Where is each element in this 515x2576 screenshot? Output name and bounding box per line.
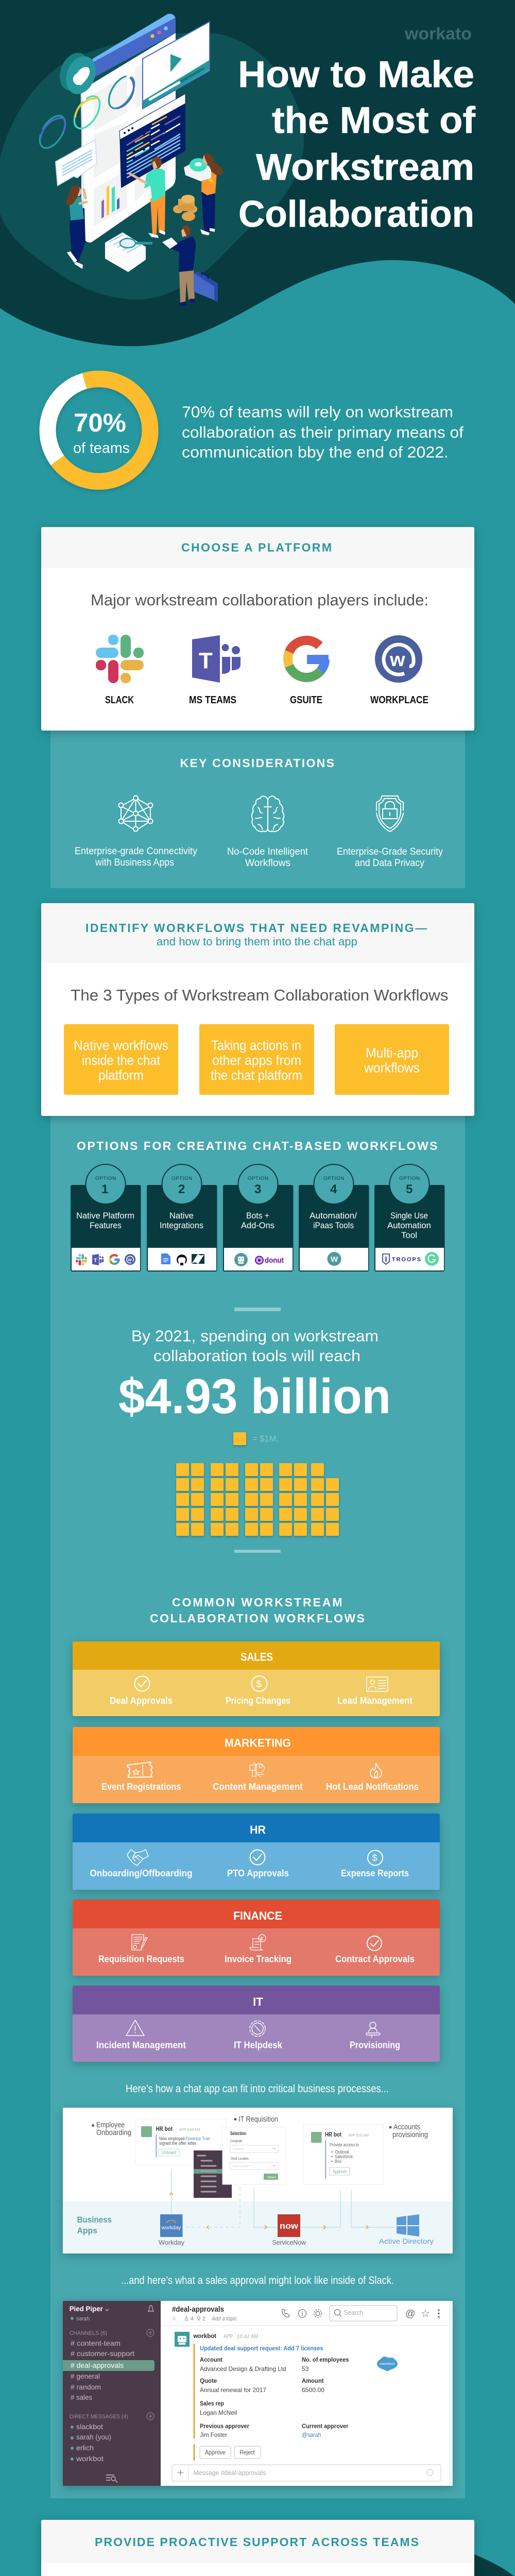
band: sales: Deal Approvals [110, 1696, 173, 1706]
heading: IDENTIFY WORKFLOWS THAT NEED REVAMPING— [85, 921, 427, 935]
icon: provisioning [366, 2022, 380, 2038]
option 3 card: Add-Ons [241, 1221, 274, 1230]
option 5 card: OPTION [399, 1176, 420, 1181]
sidebar: # content-team [71, 2339, 121, 2347]
workbot message: Account [200, 2356, 222, 2363]
sidebar: # general [71, 2372, 100, 2380]
statistic text [182, 403, 464, 461]
workbot message: Annual renewal for 2017 [200, 2386, 266, 2394]
option 4 card: iPaas Tools [313, 1221, 354, 1230]
app: workday: workday [161, 2225, 181, 2231]
option 5 card: Automation [387, 1221, 431, 1230]
code window [119, 94, 185, 188]
workbot message: Logan McNeil [200, 2409, 237, 2416]
band: finance: Contract Approvals [335, 1954, 415, 1964]
workbot message: APP [224, 2334, 233, 2340]
icon: flame [370, 1763, 382, 1778]
icon: workplace: w [389, 649, 405, 671]
donut chart: 70% of teams: of teams [73, 440, 130, 456]
briefcase [194, 272, 218, 302]
selection form card: Computer [233, 2148, 244, 2151]
icon: network [118, 795, 152, 832]
icon: warning [126, 2020, 144, 2036]
band: hr: PTO Approvals [227, 1868, 289, 1878]
approve and reject buttons [200, 2446, 261, 2459]
section title: The 3 Types of Workstream Collaboration Workflows [71, 986, 448, 1004]
logo: workato header: workato [404, 24, 472, 43]
channel header [161, 2305, 449, 2326]
icon: salesforce cloud [377, 2357, 398, 2371]
big number: $4.93 billion [118, 1369, 391, 1424]
band: it: Incident Management [96, 2040, 186, 2050]
panel: identify workflows [41, 903, 474, 1116]
icon: google docs [161, 1253, 170, 1264]
icon: dollar: $ [256, 1679, 262, 1689]
selection form card: Desk Location [233, 2165, 249, 2168]
icon: teams small [92, 1254, 104, 1265]
option 3 card: Bots + [246, 1211, 269, 1221]
channel header: ♙ 4 [184, 2316, 194, 2322]
icon: workplace [375, 635, 422, 683]
sidebar: # random [71, 2383, 101, 2391]
sidebar: sarah [76, 2316, 90, 2322]
option 3 card: OPTION [248, 1176, 268, 1181]
hr bot card 2 [303, 2125, 383, 2184]
progress rings [35, 72, 140, 152]
workbot message: Sales rep [200, 2400, 224, 2407]
option 5 card: Tool [401, 1230, 417, 1240]
heart badge [55, 48, 101, 98]
icon: dollar [368, 1851, 383, 1865]
woman left [66, 185, 87, 269]
band: sales: Lead Management [337, 1696, 413, 1706]
workbot message: 6500.00 [302, 2386, 324, 2394]
band: finance: Invoice Tracking [225, 1954, 291, 1964]
icon: salesforce cloud: salesforce [380, 2362, 395, 2366]
hr bot card 2: HR bot [325, 2131, 341, 2138]
option 3 card: 3 [254, 1182, 261, 1196]
workbot message: Updated deal support request: Add 7 licenses [200, 2345, 323, 2352]
heading: PROVIDE PROACTIVE SUPPORT ACROSS TEAMS [95, 2535, 419, 2549]
label: employee onboarding [92, 2121, 131, 2137]
statistic text: communication bby the end of 2022. [182, 443, 449, 461]
box: taking actions: Taking actions in [211, 1038, 301, 1053]
hr bot card 1: New employee [159, 2136, 185, 2141]
box: multi-app [335, 1024, 449, 1095]
selection form card [222, 2127, 286, 2184]
legend: = $1M. [252, 1434, 279, 1444]
connector lines [169, 2170, 394, 2229]
label: accounts provisioning [389, 2123, 428, 2139]
channel header: ☆ [421, 2308, 430, 2319]
panel: proactive support [41, 2520, 474, 2576]
option 2 card: Integrations [160, 1221, 203, 1230]
workbot message: No. of employees [302, 2356, 349, 2363]
approve and reject buttons: Reject [240, 2449, 255, 2456]
selection form card: Desk Location [231, 2157, 249, 2161]
band: hr: Onboarding/Offboarding [90, 1868, 193, 1878]
channel header: Add a topic [211, 2316, 237, 2322]
panel: key considerations background [50, 731, 465, 2498]
hr bot card 2: Provide access to [330, 2142, 359, 2147]
video card [143, 22, 210, 109]
panel: business process diagram [63, 2108, 453, 2253]
header background [0, 0, 515, 346]
chat bubble [56, 140, 97, 185]
workbot message [175, 2332, 398, 2461]
hr bot card 1: signed the offer letter. [159, 2141, 197, 2146]
icon: ms teams [192, 635, 241, 683]
selection form card: Computer [230, 2140, 243, 2143]
slack sidebar mini [194, 2150, 232, 2198]
band: finance: Requisition Requests [98, 1954, 184, 1964]
icon: handshake [127, 1850, 148, 1866]
box: native workflows: inside the chat [82, 1053, 160, 1068]
hr bot card 1 [135, 2119, 227, 2165]
icon: ms teams: T [199, 648, 213, 673]
icon: check [135, 1676, 149, 1691]
platform labels: MS TEAMS [189, 694, 236, 706]
sidebar: CHANNELS (6) [70, 2330, 107, 2336]
band: hr: HR [250, 1823, 266, 1836]
channel header: ☆ [171, 2316, 177, 2322]
icon: requisition [132, 1935, 147, 1950]
workbot message: @sarah [302, 2431, 321, 2438]
man center [130, 157, 165, 238]
icon: check [367, 1936, 382, 1951]
icon: dollar: $ [372, 1853, 377, 1863]
consideration labels [75, 846, 443, 869]
coin stacks [173, 195, 197, 221]
band: it: Provisioning [350, 2040, 400, 2050]
message input [172, 2465, 441, 2481]
icon: slack [96, 635, 144, 683]
caption: slack example: ...and here’s what a sales approval might look like inside of Slack. [121, 2275, 394, 2286]
option 5 card: Single Use [390, 1211, 428, 1221]
label: it requisition: IT Requisition [238, 2115, 278, 2124]
title: Workstream [256, 147, 474, 188]
option 3 card [223, 1164, 294, 1272]
heading: common workflows [150, 1596, 365, 1625]
platform labels: WORKPLACE [370, 694, 428, 706]
band: it [73, 1986, 440, 2062]
label: employee onboarding: Employee [96, 2121, 125, 2129]
option 1 card: OPTION [95, 1176, 116, 1181]
consideration labels: Workflows [245, 858, 290, 869]
subheading: Major workstream collaboration players include: [91, 591, 428, 609]
consideration labels: No-Code Intelligent [227, 846, 308, 857]
channel header: Search [344, 2309, 363, 2316]
sidebar: workbot [76, 2454, 104, 2463]
hr bot card 1: APP 9:00 AM [179, 2128, 200, 2132]
icon: slack small [76, 1254, 87, 1265]
icon: troops [383, 1254, 421, 1264]
option 5 card: 5 [406, 1182, 413, 1196]
band: marketing [73, 1727, 440, 1803]
panel: choose a platform [41, 527, 474, 731]
sidebar: # sales [71, 2393, 92, 2401]
option 1 card [71, 1164, 141, 1272]
band: sales: Pricing Changes [226, 1696, 290, 1706]
option 5 card [374, 1164, 445, 1272]
label: accounts provisioning: provisioning [392, 2130, 428, 2139]
icon: g suite [288, 640, 329, 677]
box: multi-app: workflows [364, 1060, 420, 1076]
icon: green circle [425, 1252, 439, 1266]
icon: teams small: T [94, 1257, 97, 1263]
sidebar: # customer-support [71, 2349, 134, 2358]
icon: lead card [367, 1677, 388, 1691]
workbot message: Jim Foster [200, 2431, 227, 2438]
hr bot card 1: Onboard [162, 2150, 176, 2155]
donut chart: 70% of teams [47, 379, 150, 481]
consideration labels: Enterprise-grade Connectivity [75, 846, 197, 857]
option 1 card: 1 [101, 1182, 108, 1196]
icon: troops: TROOPS [392, 1257, 421, 1263]
workbot message: Current approver [302, 2422, 349, 2430]
message input: Message #deal-approvals [194, 2469, 266, 2477]
box: native workflows: Native workflows [74, 1038, 168, 1053]
business apps label [77, 2215, 112, 2235]
workbot message: Quote [200, 2377, 217, 2384]
woman right with gear box [184, 153, 223, 235]
icon: gear [250, 2021, 265, 2036]
divider [234, 1550, 281, 1553]
platform labels: GSUITE [290, 694, 322, 706]
app: workday: Workday [159, 2239, 184, 2246]
option 2 card [147, 1164, 217, 1272]
title: How to Make [238, 54, 474, 95]
option 4 card [299, 1164, 369, 1272]
donut chart: 70% of teams: 70% [74, 408, 126, 437]
panel: key considerations [75, 756, 443, 869]
hr bot card 1: HR bot [156, 2125, 173, 2132]
band: hr [73, 1814, 440, 1890]
icon: shield [376, 796, 403, 832]
band: marketing: Content Management [213, 1782, 303, 1792]
option 1 card: Features [90, 1221, 122, 1230]
workbot message: workbot [193, 2332, 216, 2340]
app: servicenow: now [280, 2221, 299, 2231]
hr bot card 2: Salesforce [335, 2154, 353, 2159]
app: servicenow [272, 2214, 306, 2246]
band: finance: FINANCE [233, 1909, 282, 1922]
sidebar: sarah (you) [76, 2433, 111, 2441]
selection form card: Select [267, 2176, 276, 2179]
option 4 card: Automation/ [310, 1211, 357, 1221]
consideration labels: Enterprise-Grade Security [337, 846, 443, 857]
workbot message: Advanced Design & Drafting Ltd [200, 2365, 286, 2372]
icon: dollar [251, 1676, 267, 1691]
spending statement: collaboration tools will reach [153, 1347, 360, 1365]
app screen [81, 14, 176, 243]
label: accounts provisioning: Accounts [393, 2123, 420, 2131]
icon: workplace small [125, 1254, 135, 1265]
box: taking actions: other apps from [212, 1053, 301, 1068]
band: finance [73, 1900, 440, 1976]
footer background wave [0, 2554, 515, 2576]
option 1 card: Native Platform [76, 1211, 134, 1221]
band: it: IT [253, 1995, 264, 2008]
option 2 card: OPTION [171, 1176, 192, 1181]
statistic text: 70% of teams will rely on workstream [182, 403, 453, 421]
heading: KEY CONSIDERATIONS [180, 756, 334, 770]
selection form card: Selection [230, 2131, 246, 2136]
icon: zendesk [192, 1254, 204, 1264]
box: taking actions: the chat platform [211, 1067, 302, 1083]
option 4 card: OPTION [323, 1176, 344, 1181]
icon: github [177, 1255, 187, 1265]
workbot message: Previous approver [200, 2422, 249, 2430]
consideration labels: and Data Privacy [355, 858, 424, 869]
band: marketing: MARKETING [225, 1736, 291, 1750]
heading: common workflows: COMMON WORKSTREAM [172, 1596, 342, 1609]
band: marketing: Hot Lead Notifications [326, 1782, 419, 1792]
sidebar: Pied Piper [70, 2304, 103, 2313]
channel header: #deal-approvals [172, 2305, 224, 2314]
title: Collaboration [238, 194, 474, 235]
app: active directory [379, 2214, 434, 2245]
sidebar: DIRECT MESSAGES (4) [70, 2414, 128, 2420]
channel header: @ [405, 2309, 415, 2319]
icon: content [250, 1762, 264, 1777]
hr bot card 2: Approve [333, 2169, 347, 2174]
box: multi-app: Multi-app [366, 1045, 418, 1060]
app: workday [159, 2214, 184, 2246]
app: active directory: Active Directory [379, 2237, 434, 2245]
hr bot card 2: Outlook [335, 2149, 349, 2155]
sidebar: # deal-approvals [71, 2361, 124, 2369]
channel header: ⚲ 2 [197, 2316, 205, 2322]
panel: slack approval screenshot [63, 2301, 453, 2486]
sidebar: slackbot [76, 2422, 103, 2431]
icon: invoice [250, 1935, 266, 1950]
icon: workato w [328, 1252, 341, 1266]
business apps label: Business [77, 2215, 112, 2225]
subheading: and how to bring them into the chat app [157, 935, 357, 948]
man front with document [162, 225, 196, 306]
band: it: IT Helpdesk [234, 2040, 283, 2050]
approve and reject buttons: Approve [205, 2449, 226, 2456]
hr bot card 1: Florence Tran [185, 2136, 210, 2141]
spending statement: By 2021, spending on workstream [131, 1327, 379, 1345]
title: the Most of [272, 100, 476, 141]
business apps label: Apps [77, 2226, 97, 2235]
icon: ticket [127, 1762, 152, 1777]
heading: options: OPTIONS FOR CREATING CHAT-BASED WORKFLOWS [77, 1139, 437, 1153]
heading: common workflows: COLLABORATION WORKFLOWS [150, 1612, 365, 1625]
sidebar [63, 2301, 161, 2486]
workbot message: 53 [302, 2365, 309, 2372]
band: marketing: Event Registrations [101, 1782, 181, 1792]
hr bot card 2: APP 9:00 AM [348, 2134, 369, 2138]
statistic text: collaboration as their primary means of [182, 423, 464, 441]
icon: donut: donut [265, 1256, 284, 1265]
option 2 card: Native [169, 1211, 194, 1221]
icon: brain [252, 796, 284, 832]
option 2 card: 2 [178, 1182, 185, 1196]
box: native workflows [64, 1024, 178, 1095]
band: sales: SALES [241, 1651, 273, 1663]
option 4 card: 4 [330, 1182, 337, 1196]
caption: process diagram: Here’s how a chat app can fit into critical business processes... [126, 2083, 389, 2095]
spending statement [131, 1327, 379, 1365]
icon: g small [110, 1255, 119, 1264]
illustration: isometric team building an app [35, 14, 223, 306]
heading: CHOOSE A PLATFORM [181, 541, 332, 554]
app: servicenow: ServiceNow [272, 2239, 306, 2246]
sidebar: erlich [76, 2444, 94, 2452]
platform labels [105, 694, 428, 706]
title [238, 54, 476, 235]
box: taking actions [199, 1024, 314, 1095]
label: employee onboarding: Onboarding [96, 2128, 131, 2137]
consideration labels: with Business Apps [95, 857, 174, 868]
workbot message: 10:42 AM [237, 2334, 259, 2340]
icon: donut [255, 1256, 284, 1265]
icon: workplace small: w [128, 1257, 132, 1262]
platform labels: SLACK [105, 694, 134, 706]
divider [234, 1308, 281, 1311]
paper stack with magnifier [105, 232, 152, 272]
icon: workato w: W [331, 1255, 338, 1264]
workbot message: Amount [302, 2377, 324, 2384]
band: hr: Expense Reports [341, 1868, 409, 1878]
icon: invoice: $ [261, 1936, 263, 1941]
hr bot card 2: Box [335, 2159, 341, 2164]
pictogram chart: yellow squares [176, 1463, 339, 1536]
icon: check [250, 1850, 265, 1865]
icon: workbot [234, 1253, 248, 1266]
box: native workflows: platform [98, 1067, 144, 1083]
band: sales [73, 1641, 440, 1716]
legend [233, 1432, 279, 1445]
